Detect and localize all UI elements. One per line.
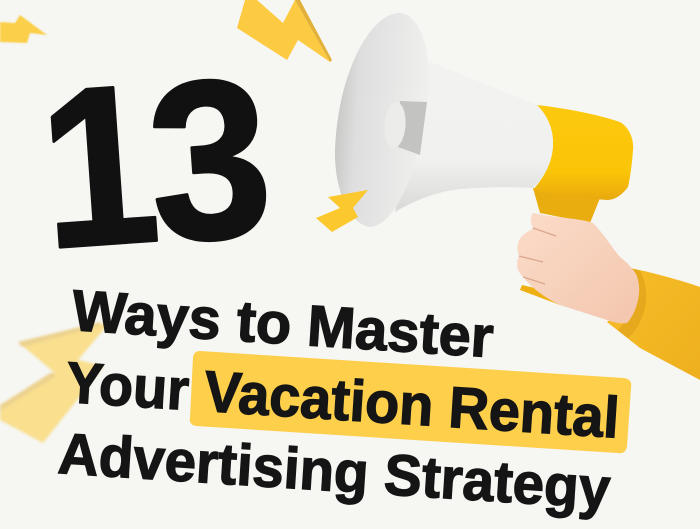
driver [398,101,427,155]
big number 13: 1 [33,36,166,297]
big number 13 [33,29,279,297]
heading line 1: Ways to Master [70,278,495,370]
handle base [520,285,565,305]
sleeve [607,268,700,380]
neck [533,188,600,223]
horn mouth [335,13,429,227]
icon: lightning bolt on horn [316,190,368,232]
heading line 3: Advertising Strategy [56,421,612,522]
yellow barrel [533,105,633,200]
hand [517,213,639,323]
big number 13: 3 [141,29,279,290]
icon: blurred bolt left [0,322,110,443]
heading line 2: Your Vacation Rental [64,350,621,451]
horn body [395,60,553,212]
icon: lightning bolt top [237,0,332,62]
highlight bar [190,351,631,453]
icon: megaphone [335,13,700,380]
icon: blurred bolt top left [0,15,47,43]
